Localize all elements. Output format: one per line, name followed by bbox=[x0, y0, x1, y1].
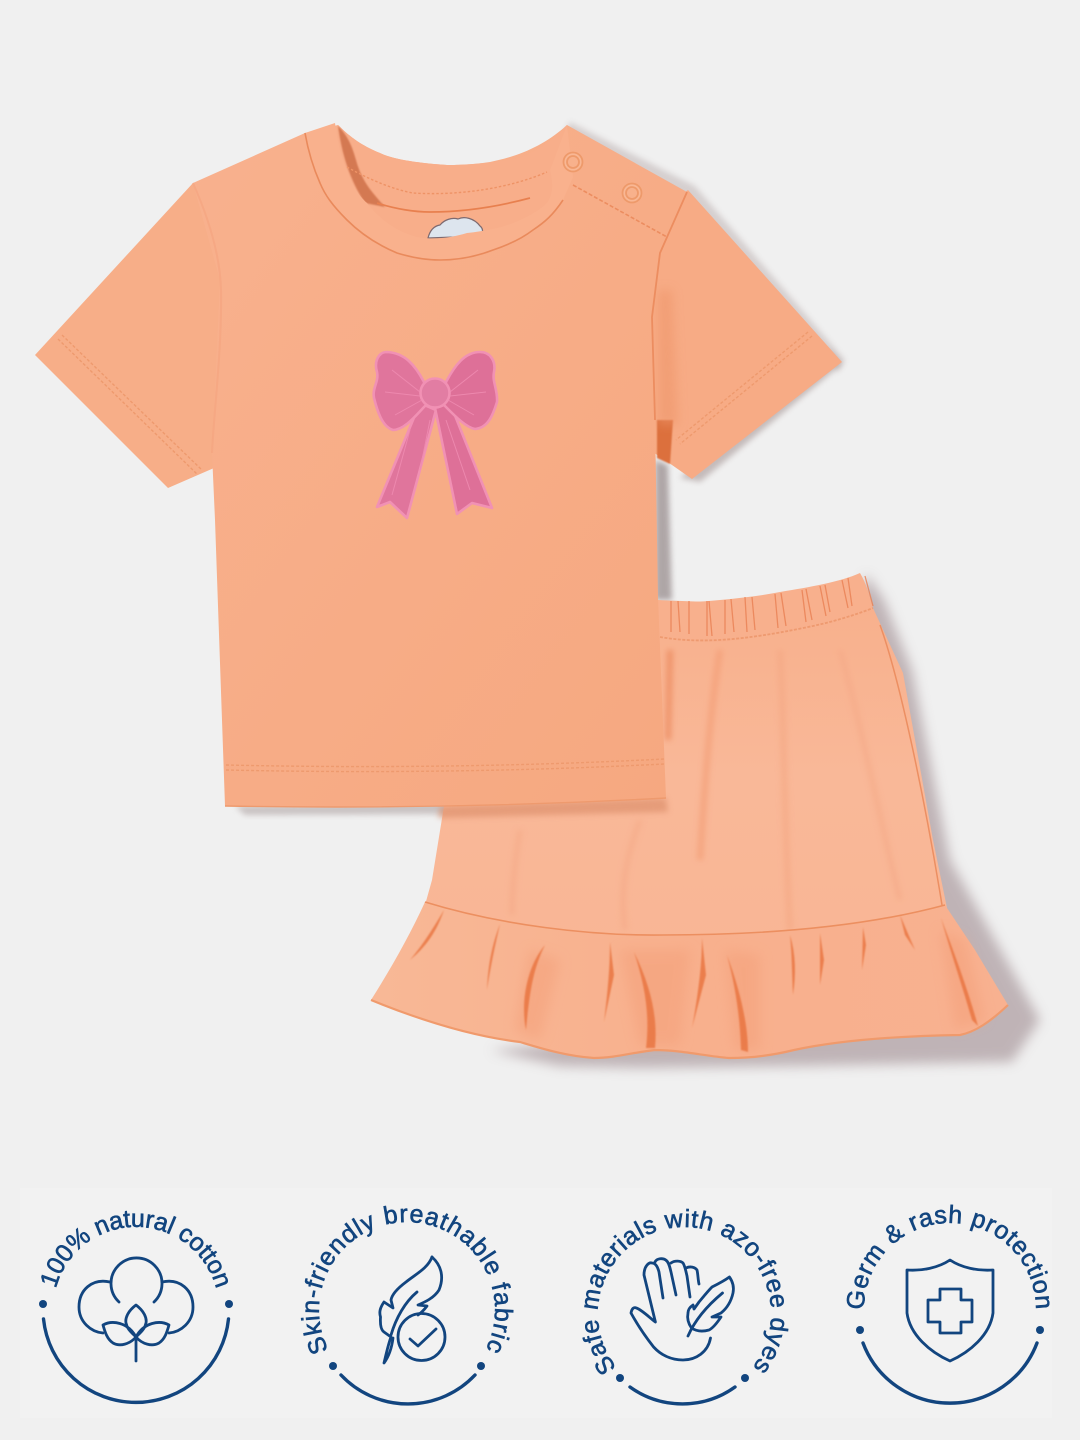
skirt waistband bbox=[658, 573, 873, 642]
drop shadows bbox=[235, 122, 1040, 1068]
badge: 100% natural cotton bbox=[39, 1210, 233, 1404]
shirt shadow on skirt bbox=[438, 798, 668, 818]
ruffle folds bbox=[410, 910, 978, 1052]
sleeve and hem stitching bbox=[58, 332, 812, 772]
curved label: Germ & rash protection bbox=[846, 1204, 1050, 1308]
front collar band bbox=[305, 123, 573, 260]
curved label: Safe materials with azo-free dyes bbox=[582, 1208, 788, 1374]
icon: shield with cross bbox=[907, 1260, 993, 1361]
bow left tail bbox=[377, 403, 436, 518]
waistband elastic stitch bbox=[660, 608, 873, 640]
badge: safe materials with azo-free dyes bbox=[582, 1208, 788, 1406]
badge strip background bbox=[20, 1188, 1052, 1418]
skirt bbox=[371, 573, 1008, 1058]
clothing set photo bbox=[35, 122, 1040, 1068]
ruffle hem edge bbox=[371, 1000, 1008, 1058]
ruffle broad shading bbox=[515, 930, 985, 1050]
skirt side seam bbox=[880, 625, 942, 905]
icon: hand with leaf bbox=[631, 1259, 733, 1360]
skirt body bbox=[425, 600, 947, 950]
ruffle bbox=[371, 902, 1008, 1058]
inner collar stitching bbox=[347, 167, 547, 194]
right sleeve armhole shade bbox=[658, 290, 678, 425]
waistband gathers bbox=[671, 576, 873, 636]
collar seam bbox=[305, 133, 563, 260]
separator dots and arc bbox=[856, 1326, 1044, 1403]
separator dots and arc bbox=[329, 1362, 485, 1404]
bow fold lines bbox=[385, 370, 486, 495]
skirt soft folds bbox=[512, 650, 900, 930]
curved label: 100% natural cotton bbox=[41, 1210, 228, 1288]
separator dots and arc bbox=[39, 1300, 233, 1402]
icon: cotton boll bbox=[79, 1258, 193, 1361]
badge: skin-friendly breathable fabric bbox=[300, 1206, 514, 1406]
neck interior back bbox=[335, 125, 567, 255]
bottom hem line bbox=[225, 798, 666, 807]
snap button 2 bbox=[622, 184, 642, 202]
shirt body bbox=[193, 125, 687, 807]
separator dots and arc bbox=[616, 1374, 749, 1404]
neck label: cloud logo bbox=[428, 218, 483, 238]
shirt left sleeve bbox=[35, 183, 228, 488]
icon: feather with check bbox=[380, 1257, 445, 1363]
inner collar seam bbox=[377, 198, 530, 212]
bow knot bbox=[420, 378, 450, 408]
bow left loop bbox=[374, 352, 426, 430]
ruffle seam bbox=[425, 902, 945, 935]
bow right loop bbox=[444, 352, 497, 429]
t-shirt bbox=[35, 123, 842, 807]
armhole seams bbox=[652, 192, 687, 420]
badge: germ and rash protection bbox=[846, 1204, 1050, 1405]
bow applique bbox=[374, 352, 497, 518]
shirt right sleeve bbox=[630, 190, 842, 479]
underside of right sleeve bbox=[657, 420, 673, 464]
inner neck shadow bbox=[338, 126, 385, 207]
curved label: Skin-friendly breathable fabric bbox=[300, 1206, 514, 1354]
shoulder placket seam bbox=[573, 185, 667, 237]
bow right tail bbox=[435, 403, 492, 514]
snap button 1 bbox=[564, 152, 582, 172]
